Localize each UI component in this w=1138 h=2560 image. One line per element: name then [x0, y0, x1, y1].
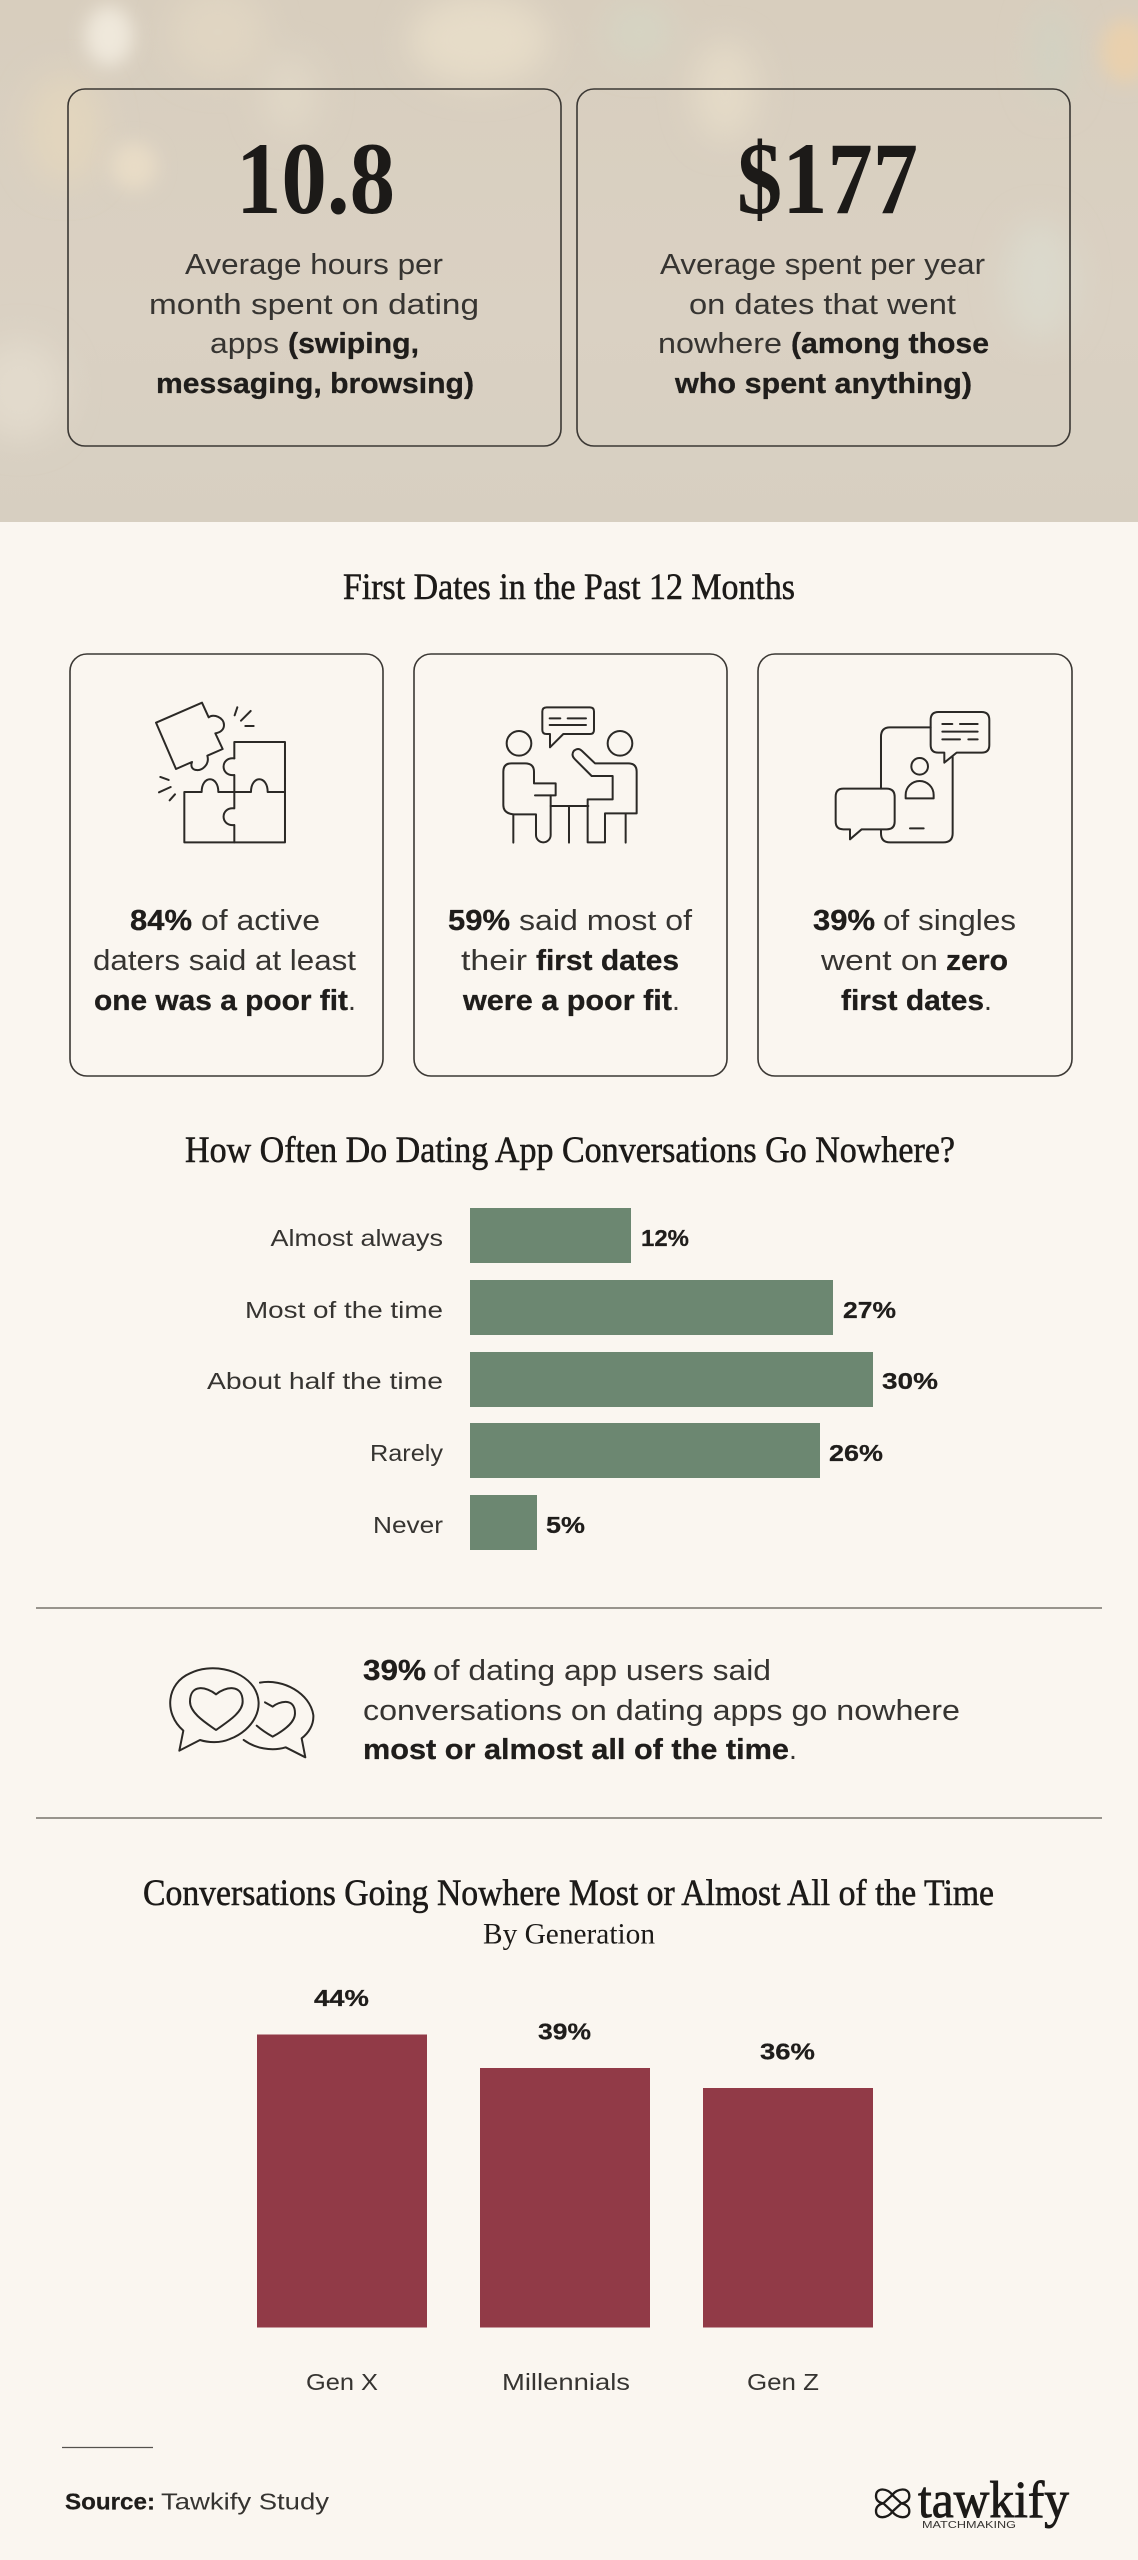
bar: Millennials 39%: Millennials	[502, 2369, 630, 2395]
source note: Tawkify Study	[161, 2488, 329, 2514]
card text: first dates	[841, 985, 984, 1017]
bar: Gen Z 36%: 36%	[760, 2038, 815, 2064]
card text: .	[672, 985, 680, 1017]
bar: about half the time 30%: 30%	[882, 1368, 938, 1394]
panel: zero first dates 39%	[758, 654, 1072, 1076]
tagline: MATCHMAKING	[922, 2519, 1016, 2531]
bar: never 5%: Never	[373, 1512, 443, 1538]
icon: phone with chat bubbles	[836, 712, 989, 842]
stat description: month spent on dating	[149, 289, 479, 321]
heading: by generation: Conversations Going Nowhere Most or Almost All of the Time	[143, 1873, 994, 1914]
bar: never 5%	[373, 1495, 585, 1550]
bar: Gen X 44%: 44%	[314, 1985, 369, 2011]
bar: rarely 26%: Rarely	[370, 1440, 443, 1466]
hero background: bokeh photo	[0, 0, 1138, 522]
stat description: (among those	[791, 328, 989, 360]
icon: chat bubbles with hearts	[170, 1668, 313, 1757]
stat description: Average spent per year	[660, 249, 986, 281]
card text	[93, 905, 356, 1017]
card text: 84%	[130, 905, 192, 937]
heading: conversations go nowhere: How Often Do Dating App Conversations Go Nowhere?	[185, 1130, 955, 1171]
card text: of active	[201, 905, 320, 937]
bar chart: by generation	[257, 1985, 873, 2395]
bar: Gen X 44%	[257, 1985, 427, 2395]
icon: interlaced hearts	[876, 2489, 909, 2517]
stat description: nowhere	[658, 328, 782, 360]
heading: by generation	[143, 1873, 994, 1950]
bar: Gen Z 36%	[703, 2038, 873, 2395]
bar: about half the time 30%	[207, 1352, 938, 1407]
source note	[65, 2488, 329, 2514]
card text: .	[984, 985, 992, 1017]
stat number: $177	[737, 122, 918, 236]
bar: almost always 12%: 12%	[641, 1225, 689, 1251]
card text: of singles	[883, 905, 1016, 937]
bar: most of the time 27%: 27%	[843, 1297, 896, 1323]
source note: Source:	[65, 2488, 155, 2514]
callout text: .	[789, 1734, 797, 1766]
bar: Millennials 39%	[480, 2018, 650, 2395]
heading: first dates: First Dates in the Past 12 Months	[343, 567, 795, 608]
panel: poor fit 84%	[70, 654, 383, 1076]
stat description: on dates that went	[689, 289, 956, 321]
subheading: By Generation	[483, 1918, 655, 1950]
card text	[813, 905, 1016, 1017]
callout text	[363, 1655, 960, 1766]
card text: their	[461, 945, 528, 977]
bar: almost always 12%	[270, 1208, 689, 1263]
stat description: Average hours per	[185, 249, 444, 281]
stat description	[149, 249, 479, 400]
stat description: messaging, browsing)	[156, 368, 474, 400]
card text: first dates	[536, 945, 679, 977]
bar: about half the time 30%: About half the time	[207, 1368, 443, 1394]
card text: went on	[820, 945, 938, 977]
stat description: (swiping,	[288, 328, 419, 360]
card text: 39%	[813, 905, 875, 937]
bar chart: how often conversations go nowhere	[207, 1208, 938, 1550]
stat card: $177 spent	[577, 89, 1070, 446]
bar: never 5%: 5%	[546, 1512, 585, 1538]
panel: poor fit 59%	[414, 654, 727, 1076]
bar: Millennials 39%: 39%	[538, 2018, 591, 2044]
bar: rarely 26%	[370, 1423, 883, 1478]
callout text: most or almost all of the time	[363, 1734, 789, 1766]
card text: .	[348, 985, 356, 1017]
icon: two people talking at table	[503, 707, 637, 843]
logo: tawkify matchmaking	[876, 2472, 1069, 2531]
bar: rarely 26%: 26%	[829, 1440, 883, 1466]
icon: puzzle	[156, 703, 285, 842]
card text	[448, 905, 692, 1017]
card text: daters said at least	[93, 945, 356, 977]
card text: said most of	[519, 905, 692, 937]
bar: most of the time 27%	[245, 1280, 896, 1335]
callout text: conversations on dating apps go nowhere	[363, 1695, 960, 1727]
callout: 39% of dating app users	[170, 1655, 960, 1766]
card text: one was a poor fit	[94, 985, 349, 1017]
bar: Gen Z 36%: Gen Z	[747, 2369, 819, 2395]
callout text: 39%	[363, 1655, 426, 1687]
bar: most of the time 27%: Most of the time	[245, 1297, 443, 1323]
card text: 59%	[448, 905, 510, 937]
stat description: who spent anything)	[674, 368, 972, 400]
wordmark: tawkify	[918, 2472, 1069, 2529]
stat description	[658, 249, 989, 400]
stat number: 10.8	[236, 122, 395, 236]
bar: almost always 12%: Almost always	[270, 1225, 443, 1251]
stat description: apps	[210, 328, 279, 360]
card text: zero	[946, 945, 1008, 977]
stat card: 10.8 hours	[68, 89, 561, 446]
card text: were a poor fit	[462, 985, 673, 1017]
bar: Gen X 44%: Gen X	[306, 2369, 378, 2395]
callout text: of dating app users said	[433, 1655, 771, 1687]
